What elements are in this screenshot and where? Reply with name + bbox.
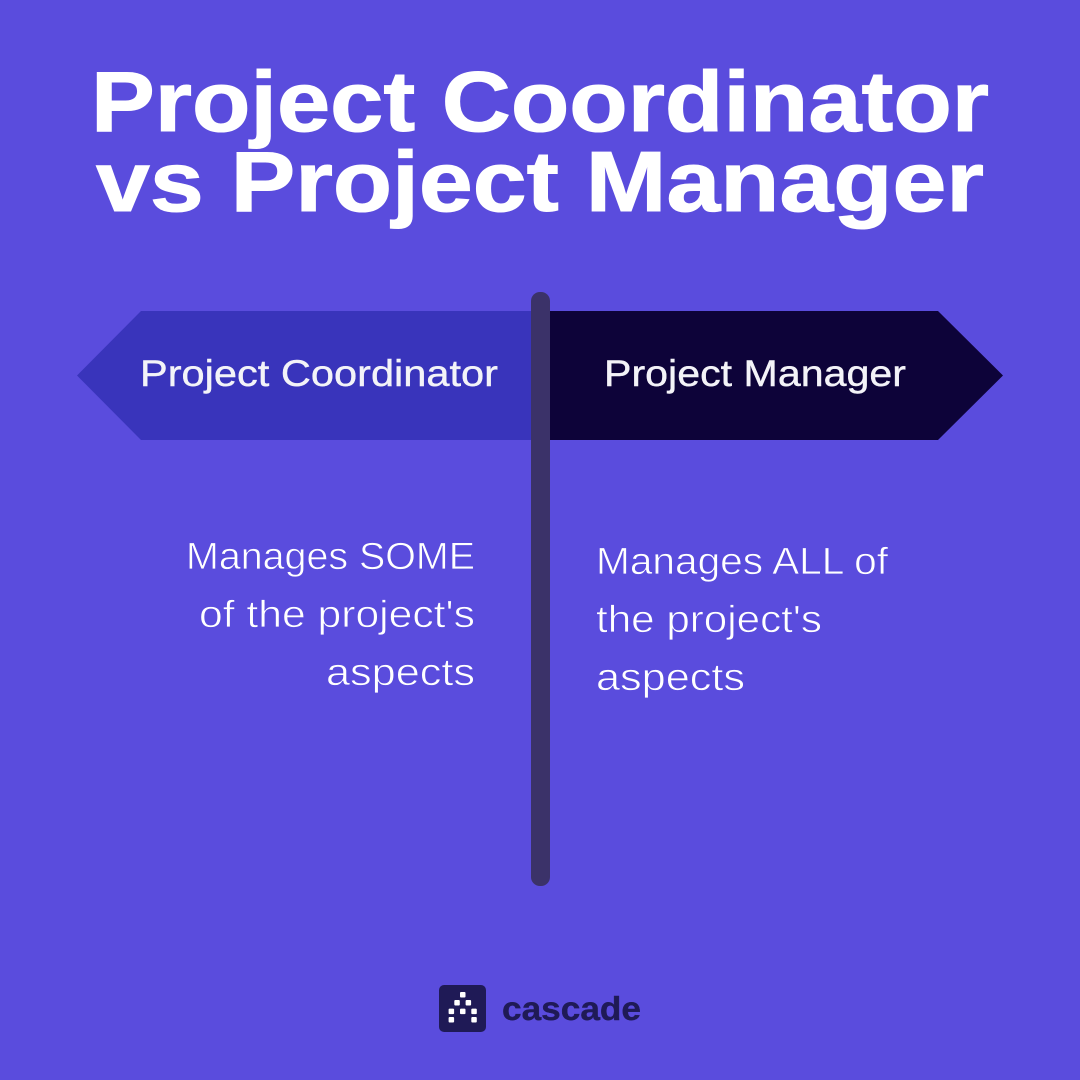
title: Project Coordinator xyxy=(91,55,989,150)
signpost pole xyxy=(531,292,550,886)
logo wordmark: cascade xyxy=(502,990,641,1027)
panel: project manager arrow sign: Project Manager xyxy=(604,353,906,394)
title xyxy=(91,55,989,230)
panel: project manager arrow sign xyxy=(545,311,1003,440)
icon: cascade mark xyxy=(439,985,486,1032)
text block: project coordinator description: aspects xyxy=(326,652,475,694)
panel: project coordinator arrow sign: Project Coordinator xyxy=(140,353,498,394)
text block: project manager description xyxy=(596,541,888,699)
text block: project coordinator description xyxy=(186,536,475,694)
panel: project coordinator arrow sign xyxy=(77,311,535,440)
text block: project manager description: aspects xyxy=(596,657,745,699)
title: vs Project Manager xyxy=(96,135,984,230)
text block: project manager description: the project's xyxy=(596,599,822,641)
logo: cascade xyxy=(439,985,641,1032)
text block: project coordinator description: of the project's xyxy=(199,594,475,636)
text block: project manager description: Manages ALL of xyxy=(596,541,888,583)
text block: project coordinator description: Manages SOME xyxy=(186,536,475,578)
